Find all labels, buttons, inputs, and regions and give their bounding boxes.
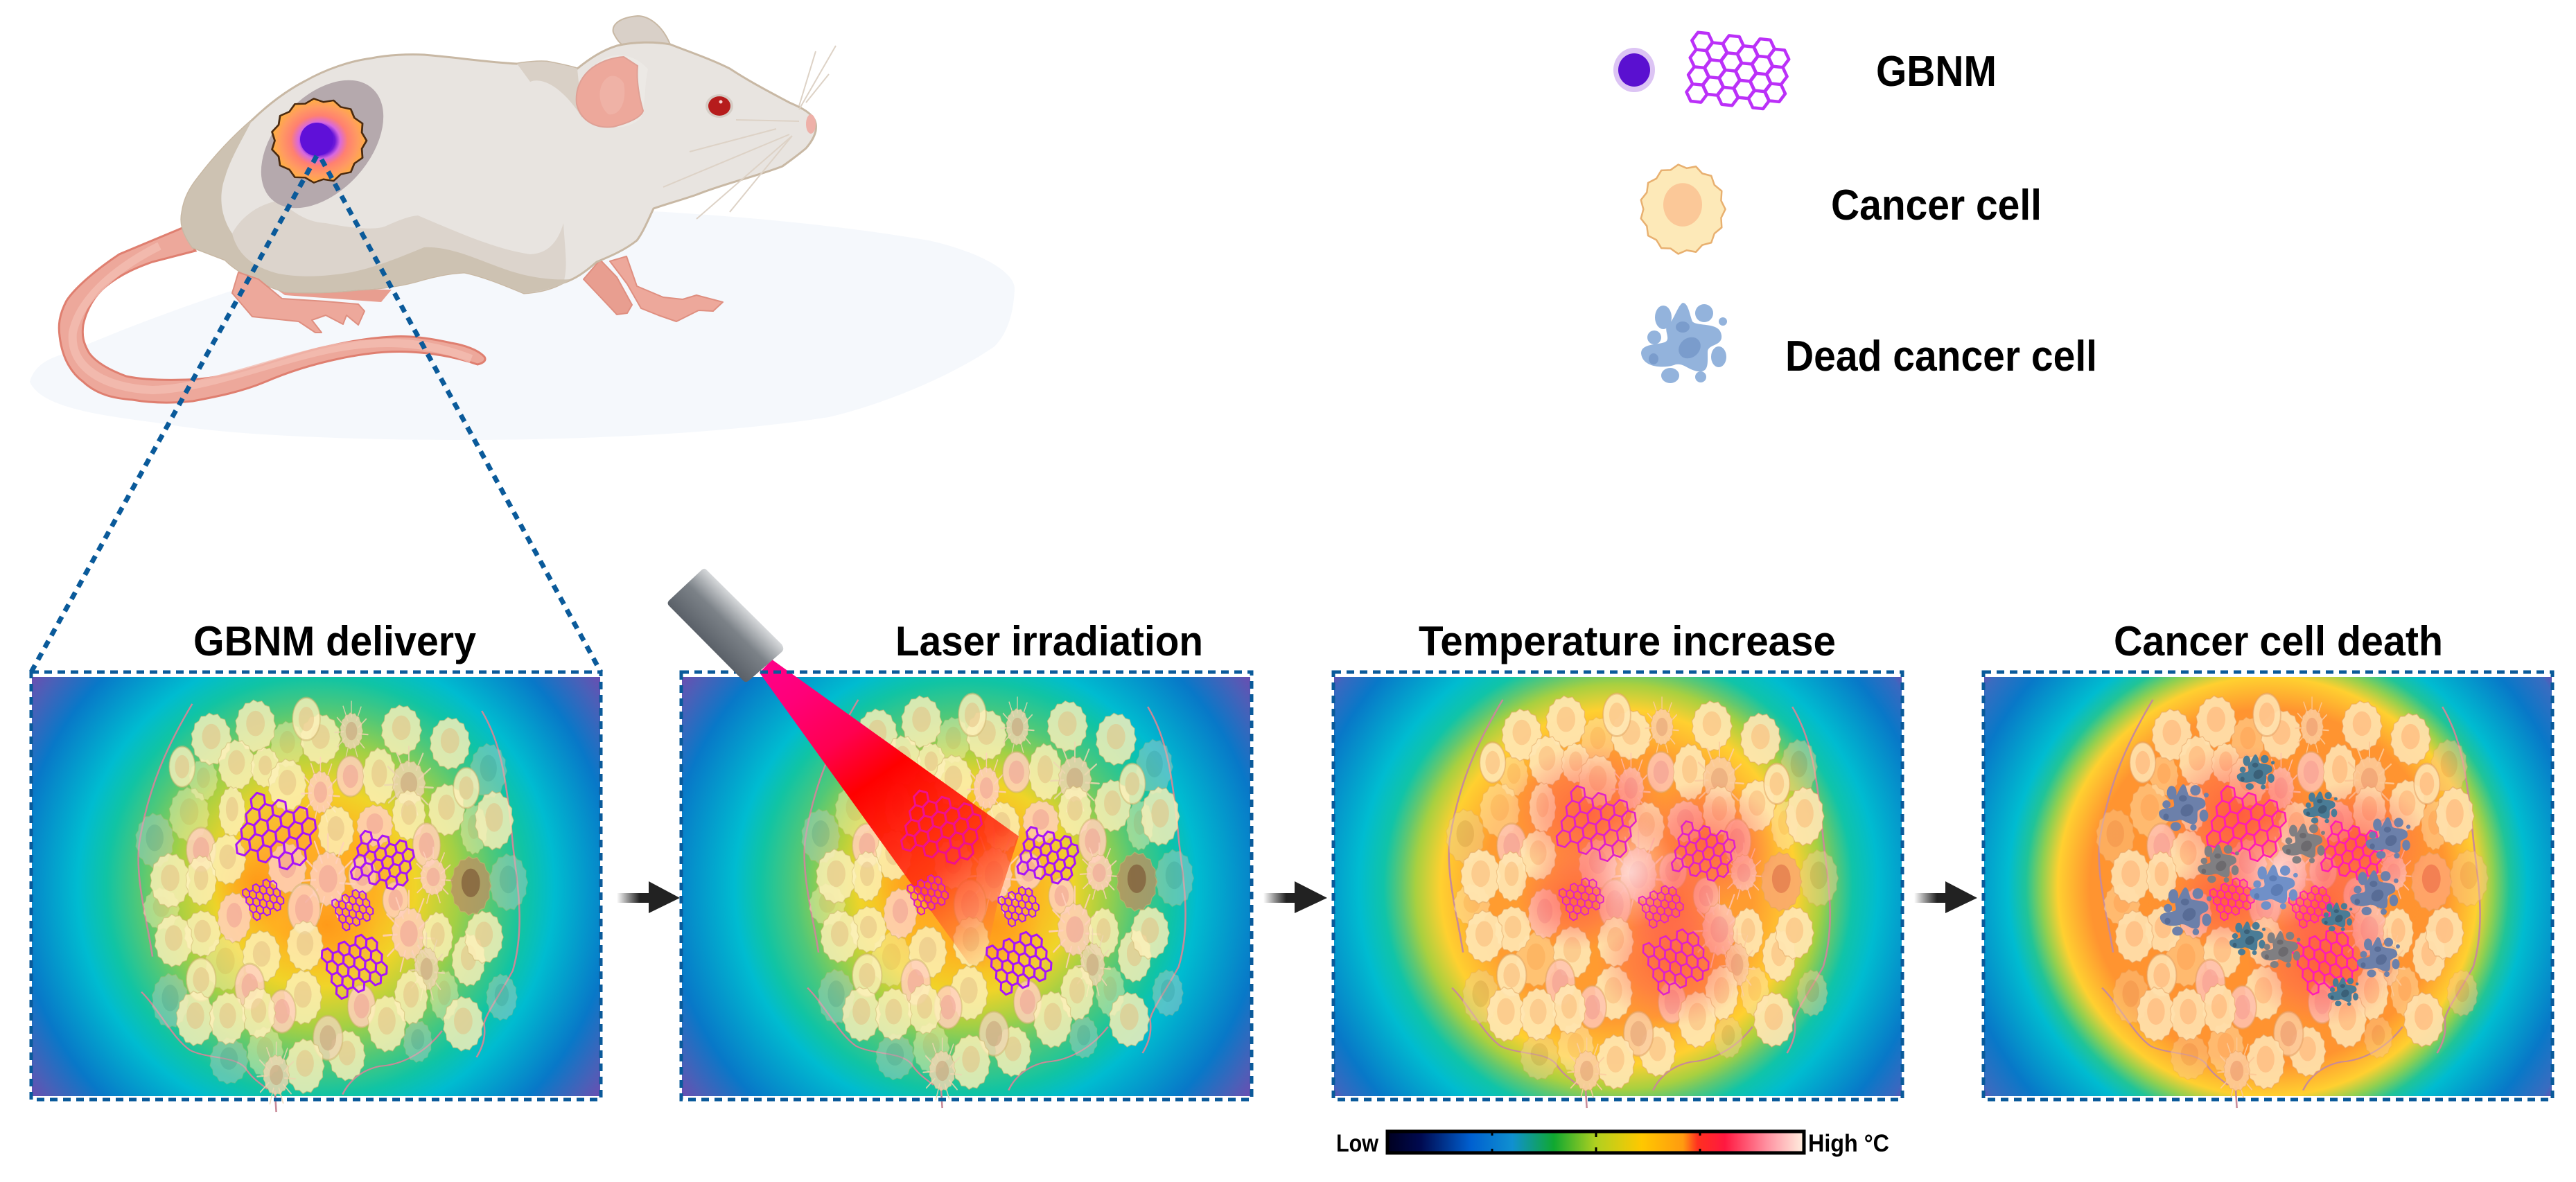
far front leg (584, 260, 632, 315)
laser beam (760, 660, 1019, 967)
panel: Temperature increase (1333, 618, 1902, 1108)
dotted frame (681, 672, 1252, 1100)
legend label dead cancer cell: Dead cancer cell (1785, 333, 2097, 380)
graphene sheets (2205, 785, 2387, 996)
thermal background (682, 677, 1250, 1096)
neck shading (517, 62, 582, 118)
colour bar (1387, 1131, 1804, 1153)
laser housing (668, 569, 783, 682)
dotted frame (31, 672, 601, 1100)
legend label GBNM: GBNM (1876, 48, 1997, 96)
thermal background (1334, 677, 1902, 1096)
mouse tail (59, 228, 485, 403)
body mid shading (225, 201, 566, 293)
ground shadow (30, 211, 1015, 440)
near front leg (610, 256, 723, 321)
temperature scale (1336, 1130, 1889, 1157)
panel: Cancer cell death (1983, 618, 2552, 1108)
arrow 2 (1263, 881, 1327, 913)
tumour cell cluster (2096, 694, 2489, 1108)
mouse body (182, 42, 816, 293)
hot spot (208, 837, 305, 927)
tumour halo on skin (237, 57, 408, 231)
legend (1613, 32, 2097, 383)
tumour cell cluster (136, 698, 528, 1112)
mouse eye (706, 94, 733, 118)
arrow 3 (1914, 881, 1977, 913)
heading: Temperature increase: Temperature increase (1419, 618, 1836, 664)
label Low: Low (1336, 1130, 1379, 1157)
graphene sheets (1554, 785, 1738, 996)
tumour cell cluster (1446, 694, 1839, 1108)
graphene sheets (234, 792, 417, 1000)
mouse illustration with tumour (30, 16, 1015, 440)
mouse nose (806, 114, 816, 134)
dotted frame (1333, 672, 1902, 1100)
GBNM dot in tumour (300, 123, 333, 156)
panel: GBNM delivery (31, 618, 601, 1112)
rear and belly shading (182, 120, 570, 293)
dotted frame (1983, 672, 2552, 1100)
dead cancer cells (2159, 755, 2410, 1006)
thermal background (32, 677, 600, 1096)
legend label cancer cell: Cancer cell (1831, 182, 2042, 229)
arrow 1 (617, 881, 680, 913)
hot spot (874, 837, 971, 927)
dotted zoom lines (31, 156, 601, 672)
far hind foot (275, 288, 392, 302)
panel: Laser irradiation (668, 569, 1252, 1108)
hot spot (945, 880, 1042, 970)
heading: Laser irradiation: Laser irradiation (895, 618, 1203, 664)
near hind leg (232, 272, 365, 333)
heat halos (1509, 745, 1779, 1026)
mouse far ear (613, 16, 670, 47)
heading: Cancer cell death: Cancer cell death (2114, 618, 2443, 664)
icon: GBNM nanoparticle (1613, 48, 1655, 92)
heading: GBNM delivery: GBNM delivery (193, 618, 477, 664)
heat halos (2159, 745, 2429, 1026)
icon: graphene sheet (1685, 32, 1791, 111)
tumour (272, 98, 367, 183)
thermal background (1984, 677, 2552, 1096)
graphene sheets (899, 790, 1081, 996)
tumour cell cluster (802, 694, 1194, 1108)
hot spot (279, 880, 376, 970)
icon: dead cancer cell (1641, 303, 1727, 383)
mouse near ear (577, 55, 648, 127)
icon: cancer cell (1641, 165, 1726, 254)
label High °C: High °C (1808, 1130, 1889, 1157)
whiskers (663, 46, 836, 219)
